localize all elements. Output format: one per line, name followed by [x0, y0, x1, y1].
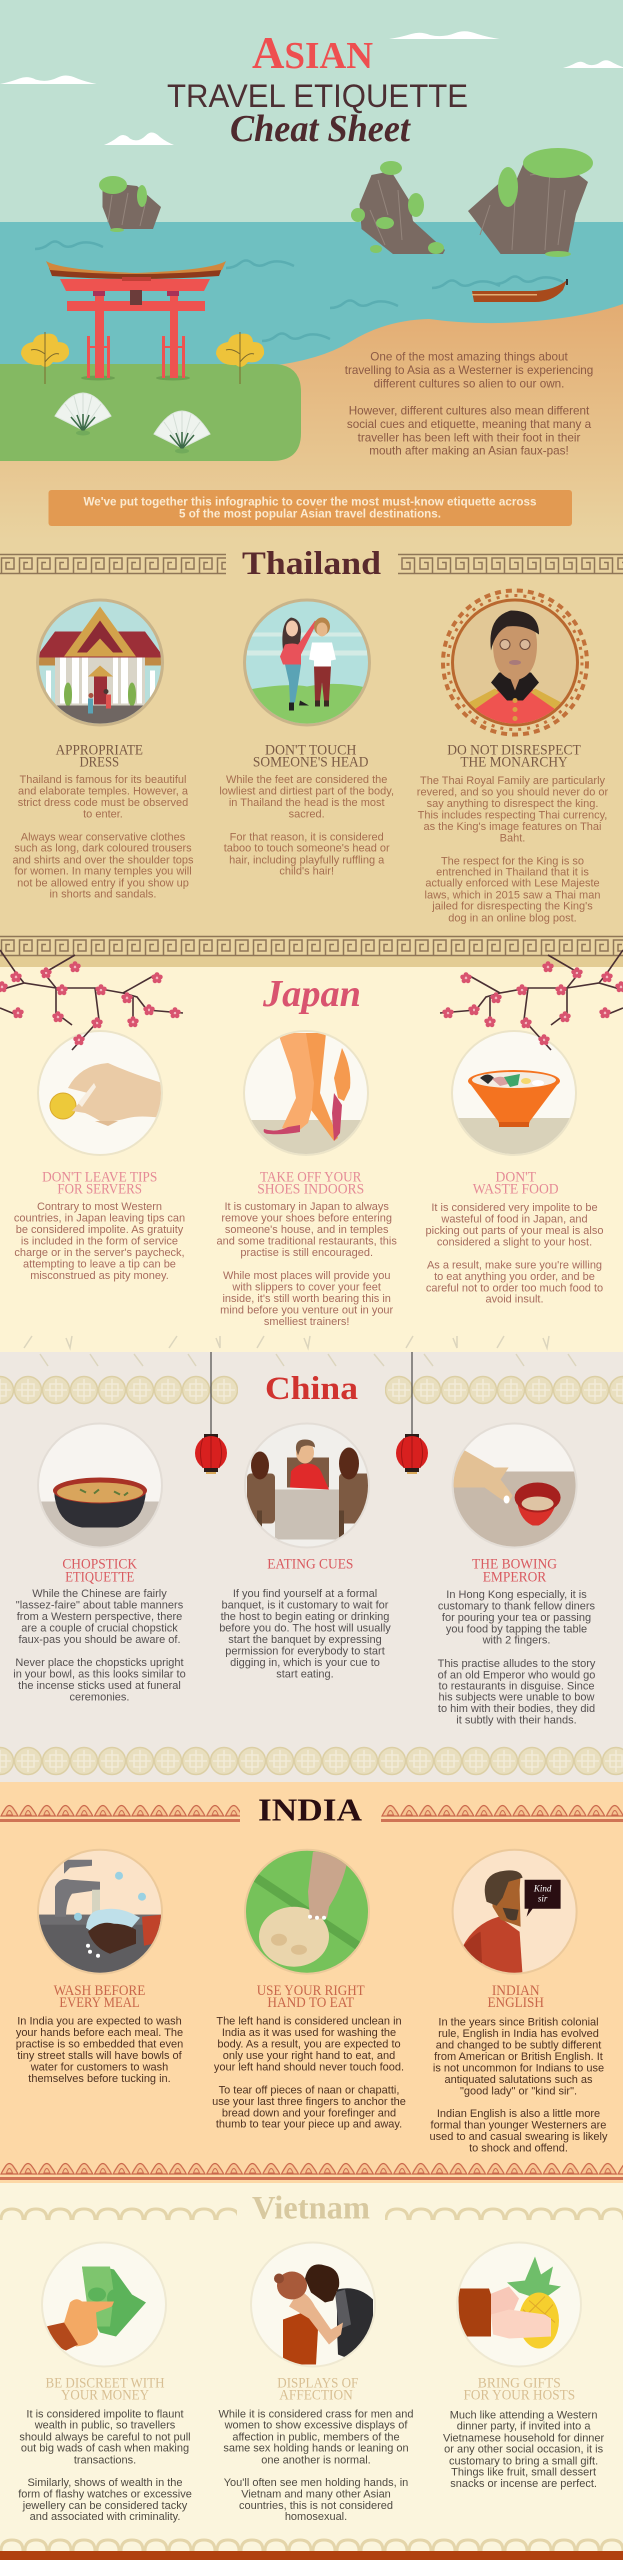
body text: Similarly, shows of wealth in the [27, 2477, 183, 2489]
body text: affection in public, members of the [232, 2431, 400, 2443]
body text: only use your right hand to eat, and [223, 2050, 395, 2062]
intro text: mouth after making an Asian faux-pas! [369, 445, 569, 458]
Vietnam bottom arch band [0, 2538, 623, 2551]
body text: bread down and your forefinger and [222, 2108, 396, 2120]
body text: strict dress code must be observed [18, 797, 188, 809]
body text: antiquated salutations such as [444, 2074, 593, 2086]
title: USE YOUR RIGHT [257, 1983, 365, 1999]
body text: thumb to tear your piece up and away. [216, 2119, 402, 2131]
body text: it subtly with their hands. [456, 1715, 577, 1727]
body text: the host to begin eating or drinking [221, 1611, 389, 1623]
body text: someone's house, and in temples [225, 1224, 389, 1236]
body text: "lassez-faire" about table manners [16, 1599, 184, 1611]
body text: Thailand is famous for its beautiful [20, 774, 186, 786]
panel: hero scene [0, 0, 623, 540]
title: APPROPRIATE [56, 742, 143, 758]
intro text: social cues and etiquette, meaning that many a [347, 418, 592, 431]
body text: countries, this is not considered [239, 2500, 393, 2512]
body text: or any other social occasion, it is [444, 2444, 604, 2456]
body text: and some traditional restaurants, this [217, 1236, 397, 1248]
icon: man with speech bubble: Kind [533, 1884, 552, 1894]
body text: attempting to leave a tip can be [23, 1259, 176, 1271]
body text: to shock and offend. [469, 2142, 568, 2154]
body text: should always be careful to not pull [19, 2431, 191, 2443]
title: DON'T TOUCH [265, 742, 357, 758]
body text: Baht. [500, 832, 525, 844]
body text: with 2 fingers. [482, 1635, 550, 1647]
Thailand bottom key band [0, 935, 623, 957]
body text: smelliest trainers! [264, 1316, 349, 1328]
body text: avoid insult. [485, 1294, 544, 1306]
panel: Japan [0, 950, 623, 1352]
body text: used to and casual swearing is likely [430, 2131, 608, 2143]
icon: tapping fingers and tea [451, 1422, 579, 1552]
clouds [0, 31, 623, 145]
icon: washing hands [36, 1848, 164, 1976]
icon: hands giving pineapple [455, 2240, 583, 2368]
title: BE DISCREET WITH [46, 2375, 165, 2391]
title: WASH BEFORE [54, 1983, 146, 1999]
yellow trees [21, 332, 264, 384]
title: WASTE FOOD [473, 1182, 559, 1198]
body text: If you find yourself at a formal [233, 1588, 377, 1600]
body text: start the banquet by expressing [228, 1634, 382, 1646]
body text: This includes respecting Thai currency, [418, 809, 607, 821]
title: DISPLAYS OF [277, 2375, 358, 2391]
body text: from American or British English. It [434, 2051, 603, 2063]
body text: to restaurants in disguise. Since [439, 1681, 594, 1693]
body text: The respect for the King is so [441, 855, 584, 867]
body text: entrenched in Thailand that it is [436, 866, 589, 878]
China bottom coin band [0, 1746, 623, 1776]
body text: Indian English is also a little more [437, 2108, 600, 2120]
body text: Things like fruit, small dessert [451, 2466, 596, 2478]
body text: Never place the chopsticks upright [15, 1657, 184, 1669]
body text: before you do. The host will usually [219, 1623, 391, 1635]
body text: such as long, dark coloured trousers [14, 843, 192, 855]
body text: laws, which in 2015 saw a Thai man [425, 889, 600, 901]
body text: with slippers to cover your feet [231, 1282, 381, 1294]
title: FOR YOUR HOSTS [464, 2388, 575, 2404]
intro text: travelling to Asia as a Westerner is experiencing [345, 364, 593, 377]
body text: While the feet are considered the [226, 774, 387, 786]
body text: remove your shoes before entering [221, 1213, 392, 1225]
Japan heading: Japan [262, 973, 361, 1015]
icon: legs and shoes [242, 1029, 370, 1160]
body text: In Hong Kong especially, it is [446, 1589, 587, 1601]
body text: wasteful of food in Japan, and [440, 1214, 588, 1226]
intro banner: We've put together this infographic to cover the most must-know etiquette across [84, 494, 537, 508]
Thailand right key band [398, 553, 623, 575]
waves [35, 242, 563, 341]
icon: king portrait [443, 590, 587, 734]
title: EMPEROR [483, 1570, 547, 1586]
intro text: different cultures so alien to our own. [374, 378, 564, 390]
title [447, 742, 581, 770]
body text: For that reason, it is considered [230, 831, 384, 843]
body text: sacred. [289, 808, 325, 820]
body text: in Thailand the head is the most [229, 797, 385, 809]
China left coin band [0, 1375, 238, 1405]
icon: orange bowl [450, 1029, 578, 1158]
bamboo leaves [40, 1354, 576, 1366]
intro text: One of the most amazing things about [370, 350, 569, 363]
body text: The left hand is considered unclean in [216, 2016, 402, 2028]
title: TAKE OFF YOUR [260, 1170, 362, 1186]
title: ENGLISH [488, 1995, 544, 2011]
body text: ceremonies. [70, 1691, 129, 1703]
title: ETIQUETTE [65, 1570, 134, 1586]
title [42, 1170, 157, 1198]
body text: say anything to disrespect the king. [427, 798, 598, 810]
body text: While most places will provide you [223, 1270, 390, 1282]
title [488, 1983, 544, 2011]
body text: dog in an online blog post. [448, 912, 577, 924]
cherry blossom left [0, 950, 183, 1050]
card: use your right hand [212, 1848, 406, 2131]
panel: Thailand [0, 538, 623, 967]
torii gate [46, 261, 226, 380]
cherry blossom right [440, 950, 623, 1050]
body text: To tear off pieces of naan or chapatti, [219, 2085, 399, 2097]
title: AFFECTION [279, 2388, 353, 2404]
body text: to eat anything you order, and be [434, 1271, 595, 1283]
body text: hair, including playfully ruffling a [229, 854, 385, 866]
intro text: However, different cultures also mean different [349, 404, 590, 417]
title: Travel Etiquette: TRAVEL ETIQUETTE [167, 78, 468, 114]
body text: faux-pas you should be aware of. [18, 1634, 181, 1646]
body text: misconstrued as pity money. [30, 1270, 169, 1282]
card: take off your shoes [217, 1029, 397, 1328]
body text: your hands before each meal. The [16, 2027, 183, 2039]
icon: touching head [243, 598, 371, 726]
title: DON'T LEAVE TIPS [42, 1170, 157, 1186]
title: SHOES INDOORS [257, 1182, 364, 1198]
title [257, 1170, 364, 1198]
green lawn [0, 364, 301, 461]
bamboo leaves [24, 1336, 549, 1348]
body text: to him with their bodies, they did [438, 1703, 595, 1715]
body text: While the Chinese are fairly [32, 1588, 167, 1600]
card: don't leave tips [14, 1029, 185, 1282]
title [277, 2375, 358, 2404]
title [54, 1983, 146, 2011]
body text: is not uncommon for Indians to use [433, 2063, 604, 2075]
body text: countries, in Japan leaving tips can [14, 1213, 185, 1225]
intro banner: 5 of the most popular Asian travel destinations. [179, 506, 441, 520]
China heading: China [265, 1371, 358, 1407]
title: Cheat Sheet: Cheat Sheet [230, 108, 411, 150]
body text: in shorts and sandals. [49, 889, 157, 901]
body text: to enter. [83, 808, 123, 820]
icon: man with speech bubble: sir [538, 1894, 548, 1904]
paper fans [55, 393, 210, 454]
body text: India as it was used for washing the [222, 2027, 396, 2039]
body text: of an old Emperor who would go [438, 1669, 595, 1681]
title: DO NOT DISRESPECT [447, 742, 581, 758]
India heading: INDIA [258, 1792, 362, 1828]
title: DRESS [79, 754, 119, 770]
body text: customary to bring a small gift. [449, 2455, 598, 2467]
Vietnam right arch band [385, 2207, 623, 2220]
Vietnam heading: Vietnam [252, 2191, 370, 2227]
body text: and associated with criminality. [30, 2511, 180, 2523]
body text: and elaborate temples. However, a [18, 785, 189, 797]
body text: is included in the form of service [21, 1236, 178, 1248]
title [46, 2375, 165, 2404]
China right coin band [385, 1375, 623, 1405]
body text: permission for everybody to start [225, 1645, 385, 1657]
title [473, 1170, 559, 1198]
rock left [99, 176, 161, 232]
title: EATING CUES [267, 1556, 353, 1572]
body text: The Thai Royal Family are particularly [420, 775, 606, 787]
body text: and changed to be subtly different [436, 2040, 601, 2052]
body text: digging in, which is your cue to [230, 1657, 380, 1669]
India right pattern band [381, 1800, 623, 1822]
body text: lowliest and dirtiest part of the body, [219, 785, 394, 797]
title: YOUR MONEY [61, 2388, 149, 2404]
body text: Vietnamese household for dinner [443, 2432, 605, 2444]
body text: use your last three fingers to anchor the [212, 2096, 406, 2108]
body text: start eating. [276, 1668, 334, 1680]
body text: for pouring your tea or passing [442, 1612, 591, 1624]
sand [0, 304, 623, 540]
body text: dinner party, if invited into a [457, 2421, 591, 2433]
body text: This practise alludes to the story [438, 1658, 596, 1670]
body text: taboo to touch someone's head or [224, 843, 390, 855]
title: SOMEONE'S HEAD [253, 754, 369, 770]
India left pattern band [0, 1800, 240, 1822]
body text: "good lady" or "kind sir". [460, 2085, 577, 2097]
body text: picking out parts of your meal is also [426, 1225, 603, 1237]
body text: form of flashy watches or excessive [18, 2489, 192, 2501]
card: indian english [430, 1848, 608, 2154]
body text: mind before you venture out in your [220, 1305, 394, 1317]
icon: banquet [243, 1422, 371, 1550]
rock right [468, 148, 593, 257]
title: FOR SERVERS [57, 1182, 142, 1198]
body text: It is customary in Japan to always [224, 1201, 389, 1213]
title: Asian: ASIAN [252, 27, 373, 78]
card: bring gifts for your hosts [443, 2240, 605, 2490]
icon: hand holding cash [40, 2240, 168, 2368]
body text: water for customers to wash [30, 2062, 168, 2074]
body text: your left hand should never touch food. [214, 2062, 404, 2074]
body text: charge or in the server's paycheck, [14, 1247, 185, 1259]
card: the bowing emperor [438, 1422, 596, 1727]
body text: It is considered very impolite to be [431, 1202, 598, 1214]
card: appropriate dress [12, 598, 194, 901]
body text: snacks or incense are perfect. [450, 2478, 597, 2490]
card: displays of affection [218, 2240, 414, 2523]
body text: Contrary to most Western [37, 1201, 162, 1213]
body text: tiny street stalls will have bowls of [17, 2050, 183, 2062]
card: don't touch someone's head [219, 598, 394, 878]
card: eating cues [219, 1422, 391, 1680]
panel: India [0, 1782, 623, 2183]
body text: same sex holding hands or leaning on [223, 2443, 409, 2455]
Vietnam left arch band [0, 2207, 237, 2220]
body text: out big wads of cash when making [21, 2443, 189, 2455]
icon: hand tipping coin [36, 1029, 164, 1157]
body text: jailed for disrespecting the King's [431, 901, 593, 913]
title [167, 27, 468, 150]
boat [472, 279, 567, 302]
body text: as the King's image features on Thai [423, 821, 602, 833]
body text: You'll often see men holding hands, in [224, 2477, 408, 2489]
intro text: traveller has been left with their foot in their [358, 431, 581, 444]
title [62, 1556, 138, 1586]
body text: It is considered impolite to flaunt [26, 2408, 184, 2420]
title: THE MONARCHY [460, 754, 568, 770]
body text: from a Western perspective, there [17, 1611, 182, 1623]
body text: in your bowl, as this looks similar to [13, 1668, 186, 1680]
title: INDIAN [492, 1983, 540, 1999]
Thailand left key band [0, 553, 226, 575]
title: EVERY MEAL [59, 1995, 140, 2011]
title [472, 1556, 557, 1586]
panel: Vietnam [0, 2183, 623, 2551]
hanging lantern right [396, 1352, 428, 1474]
body text: rule, English in India has evolved [438, 2028, 599, 2040]
body text: and shirts and over the shoulder tops [12, 854, 194, 866]
body text: As a result, make sure you're willing [427, 1260, 602, 1272]
icon: temple [36, 598, 164, 726]
panel: China [0, 1352, 623, 1782]
title [257, 1983, 365, 2011]
body text: In India you are expected to wash [17, 2016, 182, 2028]
body text: transactions. [74, 2454, 136, 2466]
India bottom pattern band [0, 2158, 623, 2180]
body text: his subjects were unable to bow [439, 1692, 595, 1704]
icon: man with speech bubble [451, 1848, 579, 1976]
body text: actually enforced with Lese Majeste [425, 878, 600, 890]
body text: child's hair! [279, 866, 334, 878]
body text: women to show excessive displays of [224, 2420, 408, 2432]
body text: one another is normal. [261, 2454, 371, 2466]
body text: practise is so embedded that even [16, 2039, 183, 2051]
title: CHOPSTICK [62, 1556, 138, 1572]
body text: Vietnam and many other Asian [241, 2489, 391, 2501]
title: BRING GIFTS [478, 2375, 561, 2391]
body text: are a couple of crucial chopstick [21, 1623, 178, 1635]
rock middle [351, 161, 445, 254]
body text: practise is still encouraged. [240, 1247, 373, 1259]
body text: wealth in public, so travellers [34, 2420, 176, 2432]
body text: homosexual. [285, 2511, 347, 2523]
body text: banquet, is it customary to wait for [222, 1599, 389, 1611]
card: be discreet with your money [18, 2240, 192, 2523]
card: chopstick etiquette [13, 1422, 186, 1703]
footer bar [0, 2551, 623, 2560]
title [464, 2375, 575, 2404]
body text: Much like attending a Western [450, 2409, 597, 2421]
body text: considered a slight to your host. [437, 1237, 592, 1249]
body text: Always wear conservative clothes [21, 831, 186, 843]
card: don't waste food [426, 1029, 603, 1306]
Thailand heading: Thailand [242, 546, 381, 582]
icon: noodle bowl [36, 1422, 164, 1552]
sea [0, 222, 623, 372]
title [253, 742, 369, 770]
body text: for women. In many temples you will [14, 866, 192, 878]
body text: themselves before tucking in. [28, 2073, 171, 2085]
hanging lantern left [195, 1352, 227, 1474]
sky [0, 0, 623, 223]
body text: In the years since British colonial [438, 2017, 599, 2029]
body text: careful not to order too much food to [426, 1283, 603, 1295]
card: do not disrespect the monarchy [417, 590, 609, 924]
card: wash before every meal [16, 1848, 183, 2085]
body text: formal than younger Westerners are [431, 2119, 606, 2131]
title: THE BOWING [472, 1556, 557, 1572]
intro banner [48, 490, 572, 526]
body text: customary to thank fellow diners [438, 1600, 596, 1612]
body text: the incense sticks used at funeral [18, 1680, 181, 1692]
title: HAND TO EAT [267, 1995, 354, 2011]
title [56, 742, 143, 770]
title: DON'T [495, 1170, 536, 1186]
body text: body. As a result, you are expected to [217, 2039, 401, 2051]
icon: hand tearing bread [243, 1848, 371, 1976]
body text: jewellery can be considered tacky [22, 2500, 188, 2512]
icon: embracing couple [249, 2240, 377, 2368]
body text: inside, it's still worth bearing this in [222, 1293, 391, 1305]
body text: While it is considered crass for men and [218, 2408, 414, 2420]
body text: revered, and so you should never do or [417, 786, 609, 798]
body text: not be allowed entry if you show up [17, 877, 189, 889]
body text: be considered impolite. As gratuity [16, 1224, 184, 1236]
body text: you food by tapping the table [446, 1623, 587, 1635]
